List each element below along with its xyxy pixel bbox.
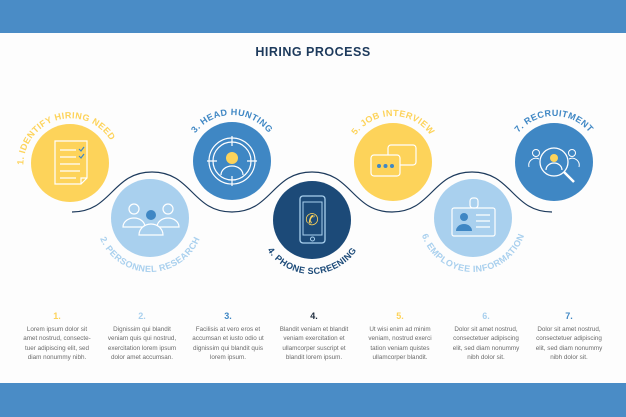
text column 5: veniam, nostrud exerci [368,335,432,342]
text column 7: elit, sed diam nonummy [536,345,602,352]
text column 6 [453,311,520,361]
text column 3 [192,311,264,361]
text column 1: tuer adipiscing elit, sed [25,345,89,352]
text column 7: nibh dolor sit. [550,354,588,361]
curved labels: 5. JOB INTERVIEW [351,110,435,134]
text column 5 [368,311,432,361]
text column 3: dignissim qui blandit quis [193,345,263,352]
step 2 circle [111,179,189,257]
text column 4: veniam exercitation et [283,335,345,342]
text column 7: Dolor sit amet nostrud, [537,326,601,333]
step 7 circle [515,123,593,201]
text column 1: amet nostrud, consecte- [23,335,91,342]
wave line [72,172,552,212]
text column 7: 7. [565,311,573,321]
text column 3: accumsan et iusto odio ut [192,335,264,342]
title: HIRING PROCESS [255,45,371,59]
text column 6: Dolor sit amet nostrud, [454,326,518,333]
text column 2: 2. [138,311,146,321]
text column 2: exercitation lorem ipsum [108,345,176,352]
text column 3: lorem ipsum. [210,354,246,361]
text column 7: consectetuer adipiscing [536,335,602,342]
text column 2: Dignissim qui blandit [113,326,171,333]
text column 4 [280,311,348,361]
text column 6: elit, sed diam nonummy [453,345,519,352]
curved labels: 4. PHONE SCREENING [268,248,356,274]
text column 2 [108,311,176,361]
text column 6: consectetuer adipiscing [453,335,519,342]
step 6 circle [434,179,512,257]
curved labels [17,108,594,274]
curved labels: 7. RECRUITMENT [514,110,594,132]
text column 1: 1. [53,311,61,321]
bottom band [0,383,626,417]
text column 3: 3. [224,311,232,321]
top band [0,0,626,33]
text column 2: dolor amet accumsan. [111,354,173,361]
step 5 circle [354,123,432,201]
step 4 circle [273,181,351,259]
text column 6: nibh dolor sit. [467,354,505,361]
text column 5: Ut wisi enim ad minim [369,326,431,333]
text column 4: ullamcorper suscript et [282,345,346,352]
text column 3: Facilisis at vero eros et [196,326,260,333]
curved labels: 3. HEAD HUNTING [191,108,272,132]
step 3 circle [193,122,271,200]
curved labels: 6. EMPLOYEE INFORMATION [422,234,524,272]
text column 2: veniam quis qui nostrud, [108,335,176,342]
text column 4: 4. [310,311,318,321]
text column 6: 6. [482,311,490,321]
curved labels: 2. PERSONNEL RESEARCH [100,236,200,272]
text column 1 [23,311,91,361]
text column 4: blandit lorem ipsum. [286,354,342,361]
text column 5: tation veniam quistes [370,345,430,352]
step 4 circle: ✆ [305,212,319,229]
text column 7 [536,311,602,361]
step 1 circle [31,124,109,202]
curved labels: 1. IDENTIFY HIRING NEED [17,112,114,164]
text column 1: Lorem ipsum dolor sit [27,326,87,333]
text column 5: 5. [396,311,404,321]
text column 4: Blandit veniam et blandit [280,326,348,333]
text column 1: diam nonummy nibh. [28,354,86,361]
text column 5: ullamcorper blandit. [373,354,427,361]
